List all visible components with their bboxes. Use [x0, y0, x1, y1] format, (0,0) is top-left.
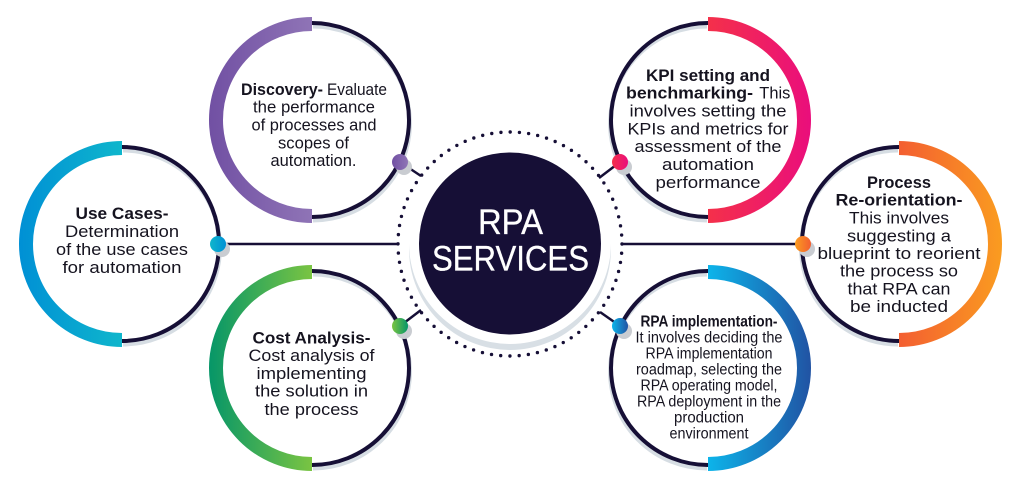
text block: that RPA can: [848, 279, 950, 298]
text block: blueprint to reorient: [818, 244, 981, 263]
hub title: RPA: [478, 203, 544, 242]
text block: the performance: [253, 98, 375, 117]
text block: Process: [867, 173, 931, 192]
text block: the process so: [840, 262, 958, 281]
ring shadow: [801, 150, 898, 344]
node: [210, 236, 226, 252]
text block: KPIs and metrics for: [628, 119, 789, 138]
ring shadow: [313, 26, 410, 220]
connector: process re-orientation to hub: [622, 243, 803, 245]
thick arc: [708, 24, 804, 216]
text block: for automation: [62, 258, 182, 277]
hub dotted ring: [398, 132, 622, 356]
text block: RPA deployment in the: [637, 394, 781, 411]
text block: implementing: [256, 364, 366, 383]
text block: Re-orientation-: [836, 191, 962, 210]
text block: of the use cases: [56, 240, 188, 259]
node: [612, 154, 628, 170]
text block: [56, 204, 188, 277]
text block: Use Cases-: [76, 204, 168, 223]
text block: of processes and: [252, 116, 376, 135]
panel: Use Cases: [25, 147, 230, 344]
node shadow: [799, 241, 815, 257]
text block: [241, 80, 387, 170]
text block: be inducted: [850, 297, 948, 316]
node shadow: [616, 323, 632, 339]
panel: Process Re-orientation: [795, 147, 996, 344]
node shadow: [616, 159, 632, 175]
text block: This involves: [849, 208, 949, 227]
text block: assessment of the: [634, 137, 782, 156]
thin ring: [215, 23, 409, 217]
text block: [248, 328, 375, 419]
text block: Cost Analysis-: [252, 328, 370, 347]
connector: discovery to hub: [400, 162, 421, 176]
text block: RPA implementation: [646, 346, 772, 363]
node: [392, 154, 408, 170]
connector: use cases to hub: [218, 243, 397, 245]
ring shadow: [123, 150, 220, 344]
text block: production: [674, 410, 744, 427]
thick arc: [216, 272, 312, 464]
text block: Evaluate: [327, 80, 387, 99]
text block: scopes of: [278, 133, 349, 152]
hub title: [432, 203, 589, 278]
text block: [636, 314, 782, 443]
connector: cost analysis to hub: [400, 310, 421, 326]
node: [612, 318, 628, 334]
thick arc: [26, 148, 122, 340]
thick arc: [899, 148, 995, 340]
text block: automation: [662, 155, 754, 174]
text block: the process: [264, 400, 358, 419]
thin ring: [802, 147, 996, 341]
text block: RPA operating model,: [640, 378, 778, 395]
thick arc: [708, 272, 804, 464]
text block: suggesting a: [847, 226, 952, 245]
panel: Cost Analysis: [215, 271, 412, 468]
panel: KPI setting and benchmarking: [610, 23, 805, 220]
text block: Discovery-: [241, 80, 323, 99]
text block: involves setting the: [630, 102, 786, 121]
node: [795, 236, 811, 252]
hub shadow crescent: [409, 148, 611, 350]
hub dark disc: [419, 152, 601, 334]
thin ring: [611, 23, 805, 217]
thin ring: [25, 147, 219, 341]
ring shadow: [313, 274, 410, 468]
text block: RPA implementation-: [640, 314, 778, 331]
text block: automation.: [270, 151, 356, 170]
text block: benchmarking-: [626, 84, 753, 103]
text block: Determination: [65, 222, 179, 241]
text block: environment: [670, 426, 749, 443]
text block: the solution in: [255, 382, 368, 401]
connector: RPA implementation to hub: [600, 312, 620, 326]
text block: It involves deciding the: [636, 330, 782, 347]
ring shadow: [610, 274, 707, 468]
node shadow: [396, 323, 412, 339]
thick arc: [216, 24, 312, 216]
connector: KPI to hub: [599, 162, 620, 178]
text block: [626, 66, 790, 192]
node shadow: [396, 159, 412, 175]
text block: roadmap, selecting the: [636, 362, 782, 379]
panel: RPA implementation: [610, 271, 805, 468]
thin ring: [611, 271, 805, 465]
ring shadow: [610, 26, 707, 220]
hub white ring: [409, 142, 611, 344]
node: [392, 318, 408, 334]
text block: Cost analysis of: [248, 346, 375, 365]
thin ring: [215, 271, 409, 465]
text block: KPI setting and: [646, 66, 770, 85]
panel: Discovery: [215, 23, 412, 220]
hub title: SERVICES: [432, 240, 589, 278]
text block: This: [759, 84, 790, 103]
node shadow: [214, 241, 230, 257]
central hub: RPA Services: [398, 132, 622, 356]
text block: performance: [656, 173, 760, 192]
text block: [818, 173, 981, 316]
